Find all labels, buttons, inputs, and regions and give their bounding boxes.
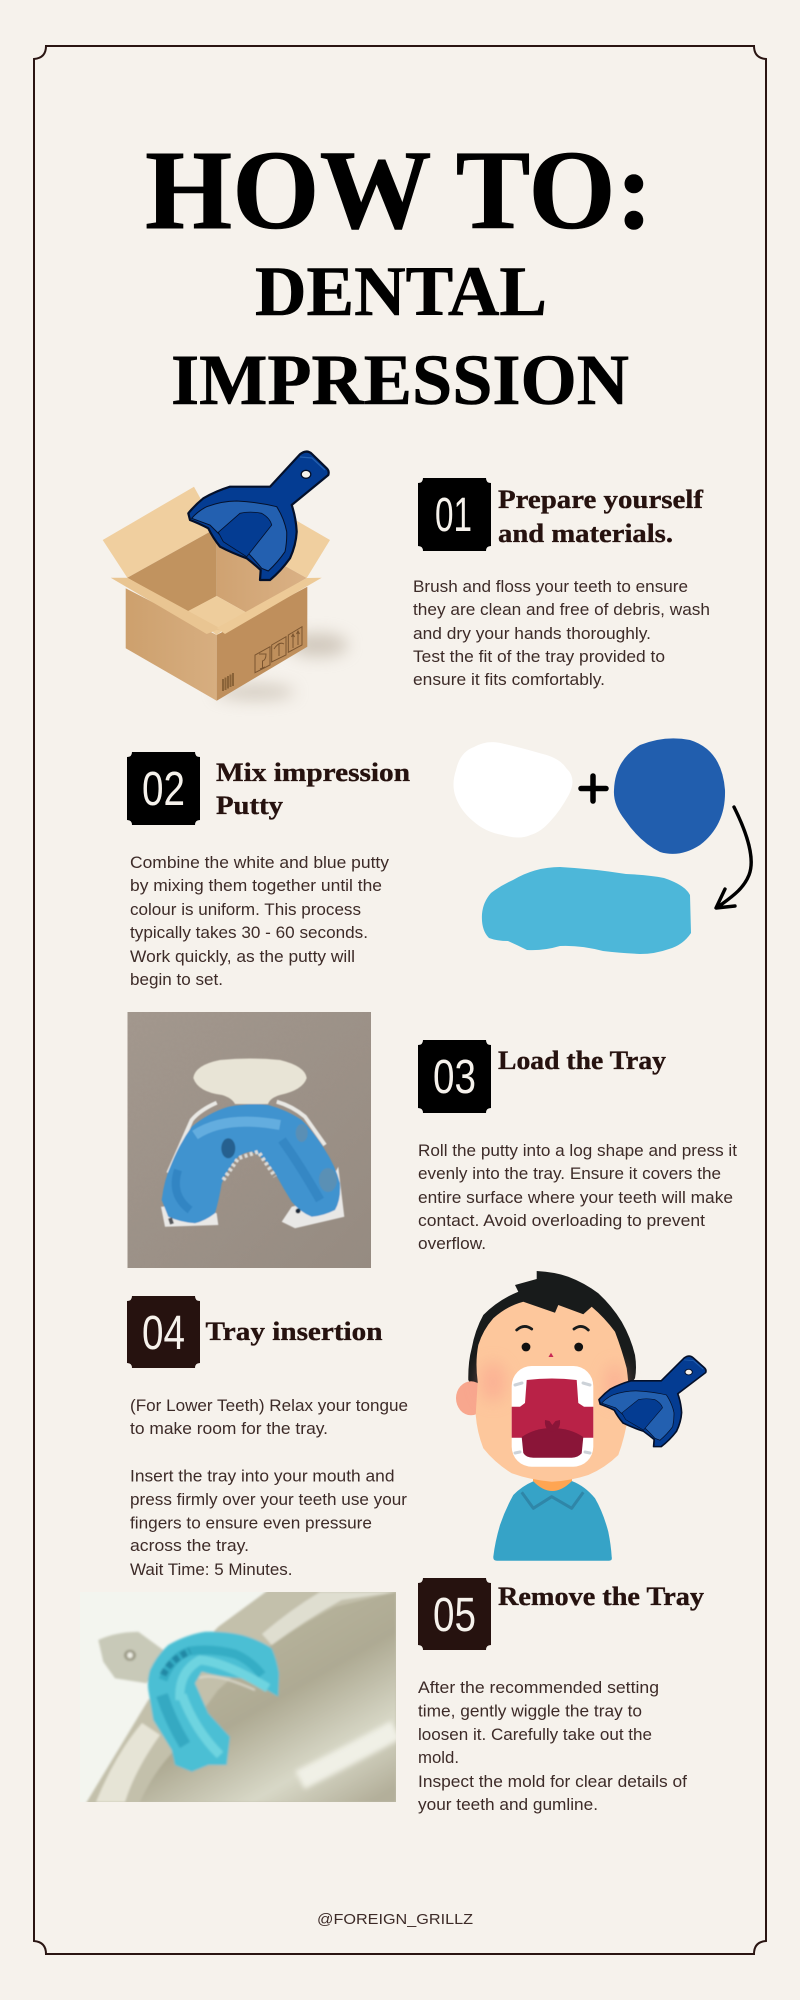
- heading 02: [216, 758, 411, 820]
- heading 02: Mix impression: [216, 758, 411, 787]
- white tray edges: [168, 1102, 325, 1173]
- box shipping marks: [223, 627, 302, 691]
- body text 04: to make room for the tray.: [130, 1420, 328, 1438]
- illustration: person with open mouth and tray: [456, 1271, 706, 1561]
- outer faces: [126, 588, 217, 701]
- body text 04: Insert the tray into your mouth and: [130, 1468, 394, 1486]
- heading 01: Prepare yourself: [498, 485, 703, 514]
- title: IMPRESSION: [171, 340, 629, 420]
- body text 02: by mixing them together until the: [130, 877, 382, 895]
- nose: [548, 1353, 554, 1357]
- heading 02: Putty: [216, 791, 283, 820]
- photo: putty-loaded tray: [127, 1012, 371, 1268]
- heading 04: Tray insertion: [206, 1317, 383, 1346]
- badge 05: 05: [433, 1589, 476, 1642]
- body text 02: [130, 854, 390, 989]
- step 01: [413, 478, 710, 689]
- heading 03: Load the Tray: [498, 1046, 666, 1075]
- blue putty blob: [614, 738, 725, 854]
- shirt: [493, 1481, 612, 1561]
- title: HOW TO:: [145, 128, 653, 253]
- body text 02: Combine the white and blue putty: [130, 854, 390, 872]
- neck: [533, 1478, 572, 1491]
- white putty blob: [454, 742, 572, 838]
- body text 03: evenly into the tray. Ensure it covers the: [418, 1165, 721, 1183]
- step 02: [127, 738, 751, 989]
- body text 04: across the tray.: [130, 1537, 249, 1555]
- tab: [193, 1058, 307, 1104]
- body text 02: colour is uniform. This process: [130, 901, 361, 919]
- illustration: open cardboard box with tray: [103, 452, 348, 701]
- ear: [456, 1381, 486, 1415]
- body text 03: Roll the putty into a log shape and press it: [418, 1142, 737, 1160]
- heading 01: and materials.: [498, 519, 673, 548]
- body text 01: [413, 578, 710, 689]
- blue putty: [162, 1104, 340, 1223]
- step 05: [80, 1578, 704, 1814]
- metal rim: [87, 1590, 400, 1810]
- badge 02: [127, 752, 200, 825]
- body text 04: Wait Time: 5 Minutes.: [130, 1561, 292, 1579]
- body text 01: Test the fit of the tray provided to: [413, 648, 665, 666]
- body text 05: loosen it. Carefully take out the: [418, 1726, 652, 1744]
- badge 04: [127, 1296, 200, 1368]
- hair: [468, 1271, 636, 1400]
- footer handle: @FOREIGN_GRILLZ: [317, 1911, 473, 1928]
- body text 05: time, gently wiggle the tray to: [418, 1702, 642, 1720]
- badge 05: [418, 1578, 491, 1650]
- body text 04: (For Lower Teeth) Relax your tongue: [130, 1397, 408, 1415]
- badge 02: 02: [142, 763, 185, 816]
- badge 04: 04: [142, 1307, 185, 1360]
- eyes: [522, 1343, 530, 1351]
- body text 05: [418, 1679, 687, 1814]
- body text 03: [418, 1142, 737, 1253]
- arrow: [716, 807, 751, 908]
- eyebrows: [517, 1326, 588, 1330]
- body text 01: and dry your hands thoroughly.: [413, 625, 651, 643]
- tray handle: [98, 1632, 163, 1683]
- title: DENTAL: [255, 253, 547, 331]
- bowl interior: [140, 1592, 396, 1802]
- body text 02: typically takes 30 - 60 seconds.: [130, 924, 368, 942]
- badge 03: 03: [433, 1051, 476, 1104]
- mouth: [512, 1366, 593, 1467]
- body text 02: Work quickly, as the putty will: [130, 948, 355, 966]
- body text 03: entire surface where your teeth will make: [418, 1189, 733, 1207]
- badge 03: [418, 1040, 491, 1113]
- heading 05: Remove the Tray: [498, 1582, 704, 1611]
- body text 04: fingers to ensure even pressure: [130, 1514, 372, 1532]
- plus sign: [581, 776, 606, 801]
- body text 05: your teeth and gumline.: [418, 1796, 598, 1814]
- back flaps: [103, 487, 217, 578]
- badge 01: 01: [435, 489, 472, 542]
- face: [476, 1302, 629, 1482]
- body text 04: [130, 1397, 408, 1579]
- illustration: putty mixing: [454, 738, 751, 954]
- blue impression: [148, 1632, 279, 1772]
- body text 01: Brush and floss your teeth to ensure: [413, 578, 688, 596]
- photo: finished impression: [80, 1590, 400, 1810]
- body text 01: they are clean and free of debris, wash: [413, 601, 710, 619]
- body text 05: After the recommended setting: [418, 1679, 659, 1697]
- body text 04: press firmly over your teeth use your: [130, 1491, 408, 1509]
- heading 01: [498, 485, 703, 548]
- body text 01: ensure it fits comfortably.: [413, 671, 605, 689]
- body text 02: begin to set.: [130, 971, 223, 989]
- inner walls: [127, 528, 217, 612]
- front flaps: [111, 578, 225, 634]
- step 04: [127, 1271, 706, 1579]
- step 03: [127, 1012, 737, 1268]
- body text 03: overflow.: [418, 1235, 486, 1253]
- body text 03: contact. Avoid overloading to prevent: [418, 1212, 705, 1230]
- icon: dental tray over box: [188, 452, 329, 580]
- mixed putty blob: [482, 867, 691, 954]
- body text 05: Inspect the mold for clear details of: [418, 1773, 687, 1791]
- title: [145, 128, 653, 420]
- icon: dental tray at cheek: [599, 1356, 706, 1447]
- body text 05: mold.: [418, 1749, 459, 1767]
- badge 01: [418, 478, 491, 551]
